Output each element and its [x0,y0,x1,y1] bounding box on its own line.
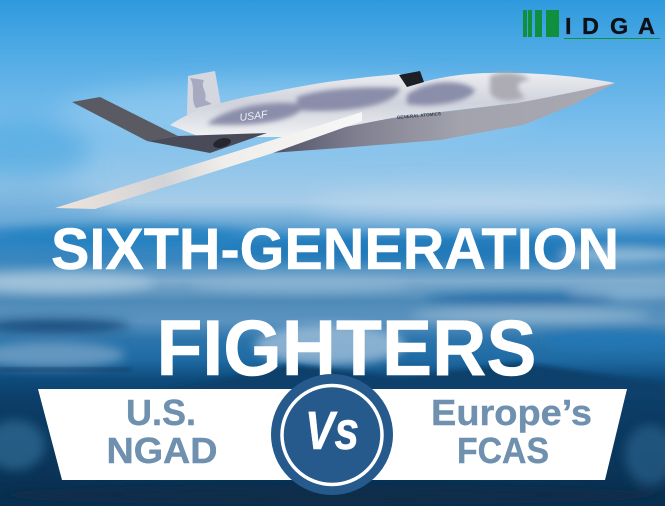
rear stabiliser [72,97,178,141]
right label: Europe's FCAS: FCAS [457,430,549,471]
title line 2: FIGHTERS [156,303,536,392]
title line 1: SIXTH-GENERATION [51,217,619,282]
vs text: Vs [305,401,359,461]
logo: IDGA [523,10,660,39]
left label: U.S. NGAD: U.S. [126,392,196,433]
upper fuselage [170,73,615,137]
logo wordmark: IDGA [565,13,655,39]
insignia [212,136,232,150]
main wing [55,112,362,209]
left label: U.S. NGAD: NGAD [106,430,218,471]
manufacturer marking: GENERAL ATOMICS [397,111,441,120]
canopy intake [399,71,424,87]
aircraft illustration [55,71,615,209]
vs badge [271,374,393,495]
tail fin [187,71,221,115]
inner stabiliser [147,133,267,153]
right label: Europe's FCAS: Europe’s [431,392,592,433]
lower fuselage [270,83,615,153]
USAF marking: USAF [239,109,269,124]
camouflage patches [207,73,530,125]
right label: Europe's FCAS [431,392,592,471]
logo bars [523,10,559,37]
left label: U.S. NGAD [106,392,218,471]
banner [38,389,627,480]
